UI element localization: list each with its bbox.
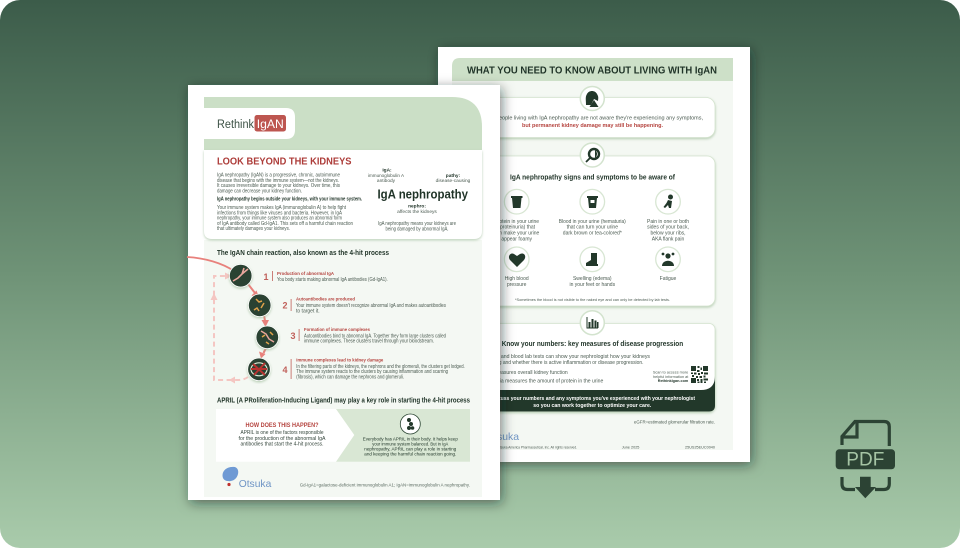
text block: how does this happen xyxy=(238,422,326,448)
footnote: abbreviations: Gd-IgA1=galactose-deficient immunoglobulin A1; IgAN=immunoglobulin A nephropathy. xyxy=(300,482,470,488)
heading: what you need to know xyxy=(452,58,733,81)
callout: scan QR: helpful information at xyxy=(653,375,689,379)
callout: discuss your numbers: Discuss your numbers and any symptoms you've experienced with your nephrologist xyxy=(490,396,695,402)
chevron: APRIL explanation xyxy=(336,409,470,462)
diagram: IgA nephropathy word breakdown: nephro: xyxy=(408,203,426,209)
step 1 xyxy=(229,264,388,287)
chevron: APRIL explanation: your immune system balanced. But in IgA xyxy=(372,442,449,448)
panel: front page, look beyond the kidneys xyxy=(187,85,500,500)
callout: discuss your numbers: so you can work together to optimize your care. xyxy=(533,403,652,409)
text block: intro: IgA nephropathy (IgAN) is a progressive, chronic, autoimmune xyxy=(217,172,340,178)
footnote: eGFR: eGFR=estimated glomerular filtration rate. xyxy=(634,420,715,424)
symptom: protein in urine: (proteinuria) that xyxy=(498,224,536,230)
text block: immune system: of IgA antibody called Gd-IgA1. This sets off a harmful chain reaction xyxy=(217,221,353,227)
icon: PDF download: PDF xyxy=(846,450,884,470)
symptom: swelling: Swelling (edema) xyxy=(573,276,612,282)
chevron: APRIL explanation: and keeping the harmful chain reaction going. xyxy=(364,452,456,458)
symptom: fatigue xyxy=(656,247,680,282)
text block: lab tests: • Proteinuria measures the amount of protein in the urine xyxy=(476,378,604,384)
step 2: Autoantibodies are produced xyxy=(296,296,355,302)
text block: intro xyxy=(217,172,340,194)
icon: magnifier xyxy=(580,143,604,167)
text block: immune system: infections from things like viruses and bacteria. However, in IgA xyxy=(217,210,343,216)
callout: scan QR xyxy=(653,366,708,383)
card: signs and symptoms xyxy=(468,156,715,306)
header band xyxy=(204,97,482,150)
panel: how does this happen xyxy=(216,409,470,462)
QR code xyxy=(691,366,708,383)
text block: intro: It causes irreversible damage to your kidneys. Over time, this xyxy=(217,183,340,189)
diagram: IgA nephropathy word breakdown: affects the kidneys xyxy=(397,209,437,215)
text block: intro: disease that begins with the immune system—not the kidneys. xyxy=(217,178,339,184)
step 1: Production of abnormal IgA xyxy=(277,271,334,277)
heading: signs and symptoms: IgA nephropathy signs and symptoms to be aware of xyxy=(510,172,675,182)
callout: scan QR: Scan to access more xyxy=(653,370,688,374)
symptom: protein in urine: Protein in your urine xyxy=(494,219,539,225)
logo: Rethink IgAN: IgAN xyxy=(257,117,284,131)
heading: know your numbers: Know your numbers: key measures of disease progression xyxy=(502,339,683,348)
step 4: Immune complexes lead to kidney damage xyxy=(296,357,384,363)
text block: immune system xyxy=(217,205,353,232)
logo: Otsuka back page: Otsuka xyxy=(486,431,519,443)
text block: lab tests: are working and whether there is active inflammation or disease progression. xyxy=(476,360,644,366)
symptom: flank pain: sides of your back, xyxy=(647,224,689,230)
chevron: APRIL explanation: Everybody has APRIL in their body. It helps keep xyxy=(363,437,458,443)
symptom: protein in urine: appear foamy xyxy=(501,236,532,242)
text block: outside the kidneys: IgA nephropathy begins outside your kidneys, with your immune system. xyxy=(217,196,363,202)
step 2 xyxy=(248,294,446,317)
symptom: high blood pressure xyxy=(504,247,529,288)
diagram: IgA nephropathy word breakdown: IgA nephropathy xyxy=(378,188,468,202)
symptom: flank pain: AKA flank pain xyxy=(652,236,684,242)
heading: chain reaction: The IgAN chain reaction, also known as the 4-hit process xyxy=(217,248,389,257)
symptom: flank pain: Pain in one or both xyxy=(647,219,689,225)
step 4: (fibrosis), which can damage the nephrons and glomeruli. xyxy=(296,374,404,380)
logo: Otsuka front page xyxy=(223,467,271,490)
step 4: 4 xyxy=(282,365,288,375)
symptom: swelling xyxy=(570,247,616,288)
symptom: flank pain: below your ribs, xyxy=(650,230,686,236)
text block: immune system: nephropathy, your immune system also produces an abnormal form xyxy=(217,216,342,222)
text block: how does this happen: antibodies that start the 4-hit process. xyxy=(240,442,324,448)
step 1: You body starts making abnormal IgA antibodies (Gd-IgA1). xyxy=(277,277,388,283)
symptom: flank pain xyxy=(647,189,689,242)
step 2: Your immune system doesn't recognize abnormal IgA and makes autoantibodies xyxy=(296,303,446,309)
logo: Rethink IgAN: Rethink xyxy=(217,119,254,131)
diagram: IgA nephropathy word breakdown: IgA: xyxy=(382,168,392,174)
footer: legal line xyxy=(487,445,715,449)
step 3: 3 xyxy=(290,331,296,341)
text block: immune system: that ultimately damages your kidneys. xyxy=(217,226,290,232)
step 3 xyxy=(256,326,446,349)
symptom: blood in urine xyxy=(559,189,626,236)
step 4: The immune system reacts to the clusters by causing inflammation and scarring xyxy=(296,369,448,375)
card: symptom awareness: but permanent kidney damage may still be happening. xyxy=(522,123,664,129)
panel: back page, living with IgAN xyxy=(187,47,895,500)
text block: intro: damage can decrease your kidney function. xyxy=(217,188,302,194)
callout: discuss your numbers xyxy=(468,376,715,412)
step 4: In the filtering parts of the kidneys, the nephrons and the glomeruli, the clusters get lodged. xyxy=(296,364,465,370)
card: know your numbers xyxy=(468,311,715,449)
chevron: APRIL explanation: nephropathy, APRIL can play a role in starting xyxy=(364,447,457,453)
symptom: protein in urine: can make your urine xyxy=(494,230,540,236)
diagram: IgA nephropathy word breakdown: antibody xyxy=(377,178,396,184)
footer: legal line: ©2025 Otsuka America Pharmaceutical, Inc. All rights reserved. xyxy=(487,445,577,449)
symptom: fatigue: Fatigue xyxy=(660,276,677,282)
symptom: high blood pressure: pressure xyxy=(507,282,527,288)
step 1: 1 xyxy=(263,272,269,282)
icon: APRIL xyxy=(400,414,420,434)
symptom: protein in urine xyxy=(494,189,540,242)
symptom: high blood pressure: High blood xyxy=(505,276,529,282)
logo: Rethink IgAN xyxy=(204,108,295,139)
step 2: to target it. xyxy=(296,308,320,314)
symptom: blood in urine: Blood in your urine (hematuria) xyxy=(559,219,626,225)
text block: lab tests: • eGFR measures overall kidney function xyxy=(476,370,568,376)
step 3: Formation of immune complexes xyxy=(304,327,370,333)
text block: how does this happen: HOW DOES THIS HAPPEN? xyxy=(246,422,319,429)
symptom: blood in urine: dark brown or tea-colored* xyxy=(563,230,622,236)
heading: what you need to know: WHAT YOU NEED TO KNOW ABOUT LIVING WITH IgAN xyxy=(467,64,717,76)
symptom: swelling: in your feet or hands xyxy=(570,282,616,288)
icon: PDF download xyxy=(836,422,895,498)
diagram: IgA nephropathy word breakdown: immunoglobulin A xyxy=(368,173,405,179)
icon: bar chart xyxy=(580,311,604,335)
diagram: IgA nephropathy word breakdown: pathy: xyxy=(446,173,461,179)
footnote: blood visibility: *Sometimes the blood is not visible to the naked eye and can only be detected by lab tests. xyxy=(515,298,670,302)
text block: immune system: Your immune system makes IgA (immunoglobulin A) to help fight xyxy=(217,205,347,211)
step 3: immune complexes. These clusters travel through your bloodstream. xyxy=(304,339,434,345)
logo: Otsuka front page: Otsuka xyxy=(239,478,271,490)
card: symptom awareness xyxy=(468,98,715,138)
diagram: IgA nephropathy word breakdown: disease-causing xyxy=(436,178,471,184)
diagram: IgA nephropathy word breakdown: IgA nephropathy means your kidneys are xyxy=(378,221,456,227)
footer: legal line: June 2025 xyxy=(622,445,639,449)
heading: APRIL: APRIL (A PRoliferation-Inducing Ligand) may play a key role in starting the 4-hit process xyxy=(217,396,470,404)
step 3: Autoantibodies bind to abnormal IgA. Together they form large clusters called xyxy=(304,333,446,339)
callout: scan QR: RethinkIgan.com xyxy=(658,379,689,383)
text block: how does this happen: APRIL is one of the factors responsible xyxy=(240,430,324,436)
arrows: 4-hit cycle xyxy=(187,257,269,384)
step 4 xyxy=(248,357,465,381)
text block: lab tests xyxy=(476,354,651,384)
text block: lab tests: Your urine and blood lab tests can show your nephrologist how your kidneys xyxy=(476,354,651,360)
text block: how does this happen: for the production of the abnormal IgA xyxy=(238,436,326,442)
panel: intro card xyxy=(204,150,482,239)
card: symptom awareness: Many people living with IgA nephropathy are not aware they're experiencing any symptoms, xyxy=(481,116,703,122)
symptom: blood in urine: that can turn your urine xyxy=(567,224,618,230)
icon: person with warning xyxy=(580,86,604,110)
step 2: 2 xyxy=(282,300,288,310)
heading: look beyond the kidneys: LOOK BEYOND THE KIDNEYS xyxy=(217,156,352,168)
diagram: IgA nephropathy word breakdown xyxy=(368,168,471,232)
diagram: IgA nephropathy word breakdown: being damaged by abnormal IgA. xyxy=(386,226,448,232)
footer: legal line: 25US25EUC0040 xyxy=(685,445,715,449)
